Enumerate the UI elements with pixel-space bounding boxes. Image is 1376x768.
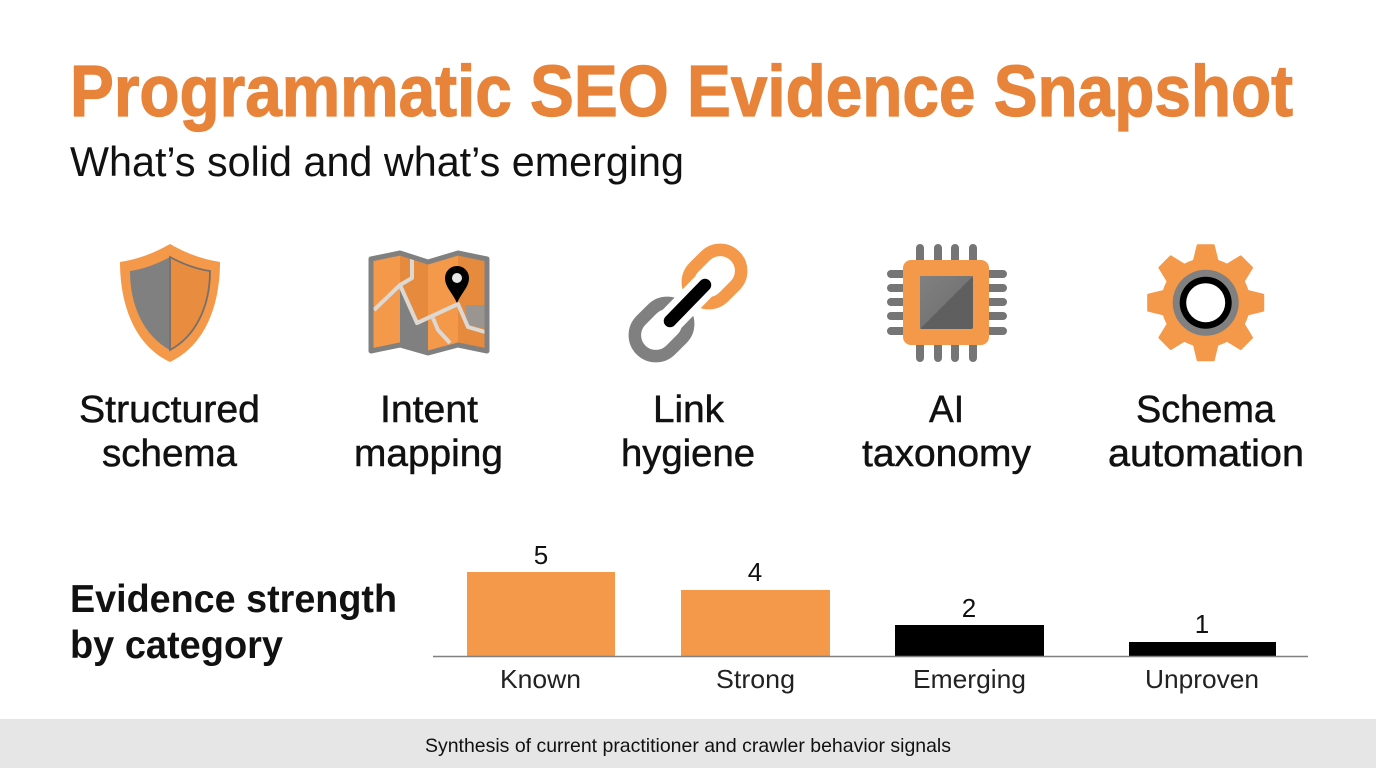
title: Programmatic SEO Evidence Snapshot [70,52,1293,132]
bar: known: Known [500,664,581,694]
heading: evidence strength by category: by category [70,624,283,667]
bar: strong: Strong [716,664,795,694]
label: link hygiene [621,389,755,475]
label: structured schema: schema [102,433,238,475]
bar chart [433,540,1308,694]
bar: unproven: 1 [1195,609,1209,639]
label: AI taxonomy [862,389,1031,475]
label: structured schema [79,389,260,475]
bar: known [467,540,615,694]
bar: strong: 4 [748,557,762,587]
label: link hygiene: Link [653,389,725,431]
footer: Synthesis of current practitioner and crawler behavior signals [425,735,951,757]
bar: emerging [895,593,1044,694]
icon: chain link [626,241,750,365]
bar: emerging: Emerging [913,664,1026,694]
icon: shield [120,244,220,362]
label: intent mapping [354,389,503,475]
label: link hygiene: hygiene [621,433,755,475]
heading: evidence strength by category [70,578,397,667]
bar: known: 5 [534,540,548,570]
icon: microchip [891,248,1003,358]
subtitle: What’s solid and what’s emerging [70,138,684,185]
label: AI taxonomy: AI [929,389,964,431]
bar: emerging: 2 [962,593,976,623]
footer [0,719,1376,768]
bar: unproven: Unproven [1145,664,1259,694]
label: schema automation [1108,389,1304,475]
icon: gear [1148,245,1263,360]
bar: unproven [1129,609,1276,694]
heading: evidence strength by category: Evidence strength [70,578,397,621]
label: schema automation: automation [1108,433,1304,475]
label: AI taxonomy: taxonomy [862,433,1031,475]
label: intent mapping: Intent [380,389,478,431]
bar: strong [681,557,830,694]
icon: map [371,253,487,353]
label: structured schema: Structured [79,389,260,431]
label: intent mapping: mapping [354,433,503,475]
label: schema automation: Schema [1136,389,1276,431]
